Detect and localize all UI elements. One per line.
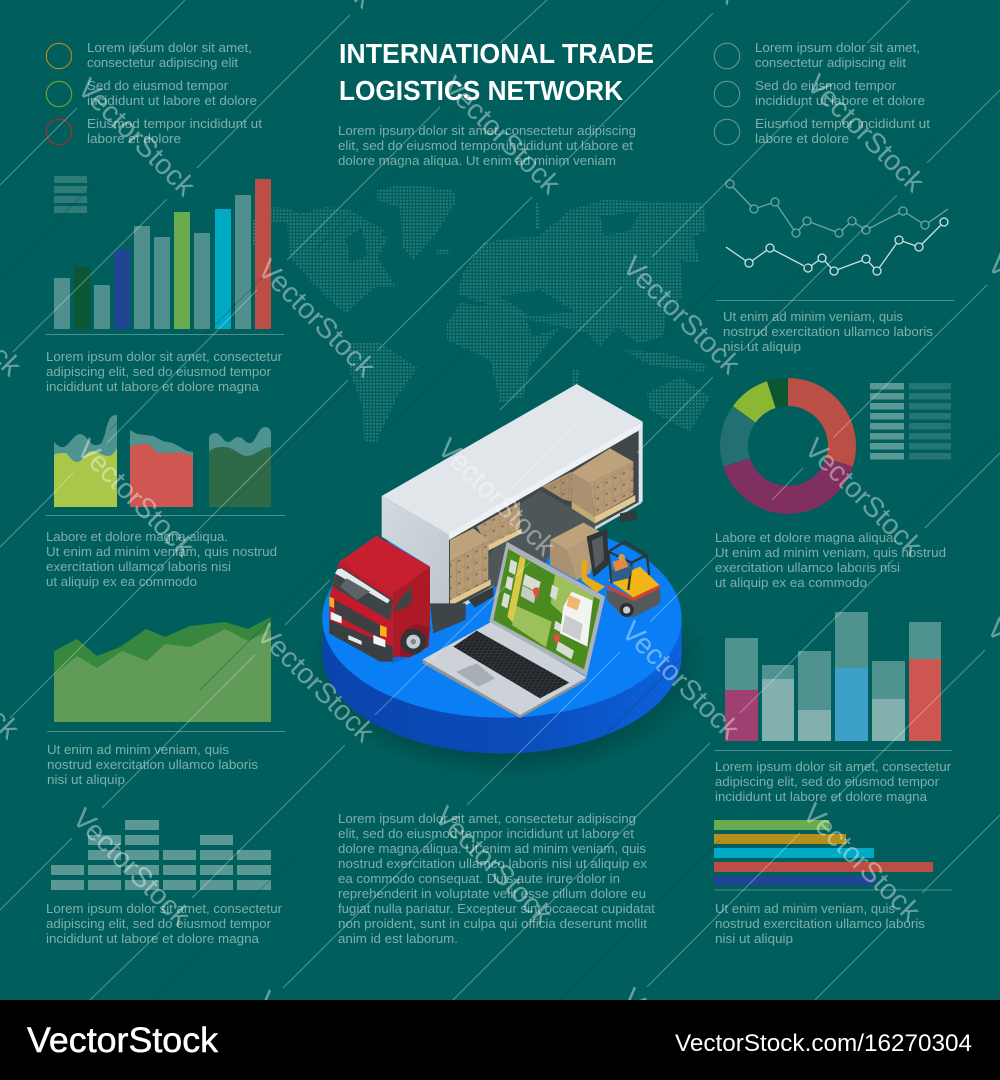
- truck trailer: [382, 384, 643, 615]
- text block: horizontal bars caption: Ut enim ad minim veniam, quis: [715, 902, 895, 916]
- text block: equalizer caption: [46, 902, 282, 946]
- legend right: incididunt ut labore et dolore: [755, 94, 925, 108]
- text block: equalizer caption: incididunt ut labore et dolore magna: [46, 932, 259, 946]
- legend right: Eiusmod tempor incididunt ut: [755, 117, 931, 131]
- text block: line chart caption: nisi ut aliquip: [723, 340, 801, 354]
- text block: donut caption: ut aliquip ex ea commodo: [715, 576, 867, 590]
- VectorStock watermark overlay: VectorStock: [615, 615, 746, 746]
- text block: donut caption: Labore et dolore magna aliqua.: [715, 531, 897, 545]
- VectorStock watermark overlay: VectorStock: [798, 432, 929, 563]
- horizontal bar chart: [714, 820, 952, 890]
- small area charts: [46, 415, 285, 516]
- footer bar: [0, 1000, 1000, 1080]
- legend right: Lorem ipsum dolor sit amet,: [755, 41, 920, 55]
- title: LOGISTICS NETWORK: [339, 75, 623, 106]
- legend left: incididunt ut labore et dolore: [87, 94, 257, 108]
- legend left: Lorem ipsum dolor sit amet,: [87, 41, 252, 55]
- text block: stacked bars caption: Lorem ipsum dolor sit amet, consectetur: [715, 760, 951, 774]
- center body text: nostrud exercitation ullamco laboris nisi ut aliquip ex: [338, 857, 648, 871]
- intro text: dolore magna aliqua. Ut enim ad minim veniam: [338, 154, 616, 168]
- footer image url: VectorStock.com/16270304: [675, 1030, 972, 1057]
- text block: area charts caption: ut aliquip ex ea commodo: [46, 575, 197, 589]
- text block: area charts caption: exercitation ullamco laboris nisi: [46, 560, 231, 574]
- legend left: Eiusmod tempor incididunt ut: [87, 117, 263, 131]
- cargo boxes: [450, 448, 635, 606]
- center body text: dolore magna aliqua. Ut enim ad minim veniam, quis: [338, 842, 646, 856]
- text block: horizontal bars caption: [715, 902, 925, 946]
- dotted world map: [253, 185, 710, 443]
- VectorStock watermark overlay: VectorStock: [428, 800, 559, 931]
- center body text: [338, 812, 656, 946]
- VectorStock watermark overlay: VectorStock: [800, 68, 931, 199]
- text block: donut caption: exercitation ullamco laboris nisi: [715, 561, 900, 575]
- VectorStock watermark overlay: VectorStock: [251, 253, 382, 384]
- title: INTERNATIONAL TRADE: [339, 38, 654, 69]
- text block: equalizer caption: Lorem ipsum dolor sit amet, consectetur: [46, 902, 282, 916]
- center body text: ea commodo consequat. Duis aute irure dolor in: [338, 872, 620, 886]
- VectorStock watermark overlay: VectorStock: [70, 433, 201, 564]
- text block: horizontal bars caption: nisi ut aliquip: [715, 932, 793, 946]
- legend right: labore et dolore: [755, 132, 849, 146]
- truck cab: [329, 536, 466, 662]
- VectorStock watermark overlay: VectorStock: [250, 618, 381, 749]
- legend right: [714, 41, 931, 146]
- center body text: anim id est laborum.: [338, 932, 458, 946]
- text block: equalizer caption: adipiscing elit, sed do eiusmod tempor: [46, 917, 271, 931]
- text block: stacked bars caption: adipiscing elit, sed do eiusmod tempor: [715, 775, 939, 789]
- equalizer chart: [51, 820, 271, 890]
- text block: green area caption: Ut enim ad minim veniam, quis: [47, 743, 229, 757]
- central logistics illustration: [308, 384, 708, 780]
- text block: area charts caption: Ut enim ad minim veniam, quis nostrud: [46, 545, 277, 559]
- legend left: Sed do eiusmod tempor: [87, 79, 228, 93]
- VectorStock watermark overlay: VectorStock: [616, 250, 747, 381]
- forklift: [582, 528, 661, 617]
- legend right: consectetur adipiscing elit: [755, 56, 907, 70]
- green area chart: [47, 617, 285, 732]
- text block: donut caption: Ut enim ad minim veniam, quis nostrud: [715, 546, 946, 560]
- VectorStock watermark overlay: VectorStock: [71, 72, 202, 203]
- VectorStock watermark overlay: VectorStock: [431, 432, 562, 563]
- text block: green area caption: nisi ut aliquip: [47, 773, 125, 787]
- laptop: [423, 542, 605, 718]
- text block: bar chart caption: incididunt ut labore et dolore magna: [46, 380, 259, 394]
- intro text: Lorem ipsum dolor sit amet, consectetur adipiscing: [338, 124, 636, 138]
- VectorStock watermark overlay: VectorStock: [796, 797, 927, 928]
- text block: green area caption: [47, 743, 258, 787]
- center body text: fugiat nulla pariatur. Excepteur sint occaecat cupidatat: [338, 902, 656, 916]
- legend left: consectetur adipiscing elit: [87, 56, 239, 70]
- line chart: [716, 180, 954, 300]
- donut chart: [720, 378, 856, 514]
- VectorStock watermark overlay: VectorStock: [66, 802, 197, 933]
- legend right: Sed do eiusmod tempor: [755, 79, 896, 93]
- donut legend table: [870, 383, 951, 460]
- center body text: Lorem ipsum dolor sit amet, consectetur adipiscing: [338, 812, 636, 826]
- VectorStock watermark overlay: VectorStock: [436, 70, 567, 201]
- center body text: reprehenderit in voluptate velit esse cillum dolore eu: [338, 887, 646, 901]
- text block: donut caption: [715, 531, 946, 590]
- text block: bar chart caption: Lorem ipsum dolor sit amet, consectetur: [46, 350, 282, 364]
- text block: line chart caption: nostrud exercitation ullamco laboris: [723, 325, 933, 339]
- text block: green area caption: nostrud exercitation ullamco laboris: [47, 758, 258, 772]
- intro text: [338, 124, 636, 168]
- legend left: labore et dolore: [87, 132, 181, 146]
- center body text: elit, sed do eiusmod tempor incididunt ut labore et: [338, 827, 635, 841]
- title: [339, 38, 654, 106]
- text block: line chart caption: Ut enim ad minim veniam, quis: [723, 310, 903, 324]
- text block: stacked bars caption: [715, 760, 951, 804]
- text block: line chart caption: [723, 310, 933, 354]
- legend left: [46, 41, 263, 146]
- bar chart left: [46, 176, 284, 334]
- text block: stacked bars caption: incididunt ut labore et dolore magna: [715, 790, 927, 804]
- text block: area charts caption: [46, 530, 277, 589]
- text block: horizontal bars caption: nostrud exercitation ullamco laboris: [715, 917, 925, 931]
- platform: [308, 519, 708, 780]
- text block: bar chart caption: [46, 350, 282, 394]
- footer logo text: VectorStock: [27, 1021, 219, 1060]
- stacked bar chart: [714, 612, 952, 750]
- center body text: non proident, sunt in culpa qui officia deserunt mollit: [338, 917, 648, 931]
- intro text: elit, sed do eiusmod tempor incididunt ut labore et: [338, 139, 634, 153]
- text block: area charts caption: Labore et dolore magna aliqua.: [46, 530, 228, 544]
- text block: bar chart caption: adipiscing elit, sed do eiusmod tempor: [46, 365, 271, 379]
